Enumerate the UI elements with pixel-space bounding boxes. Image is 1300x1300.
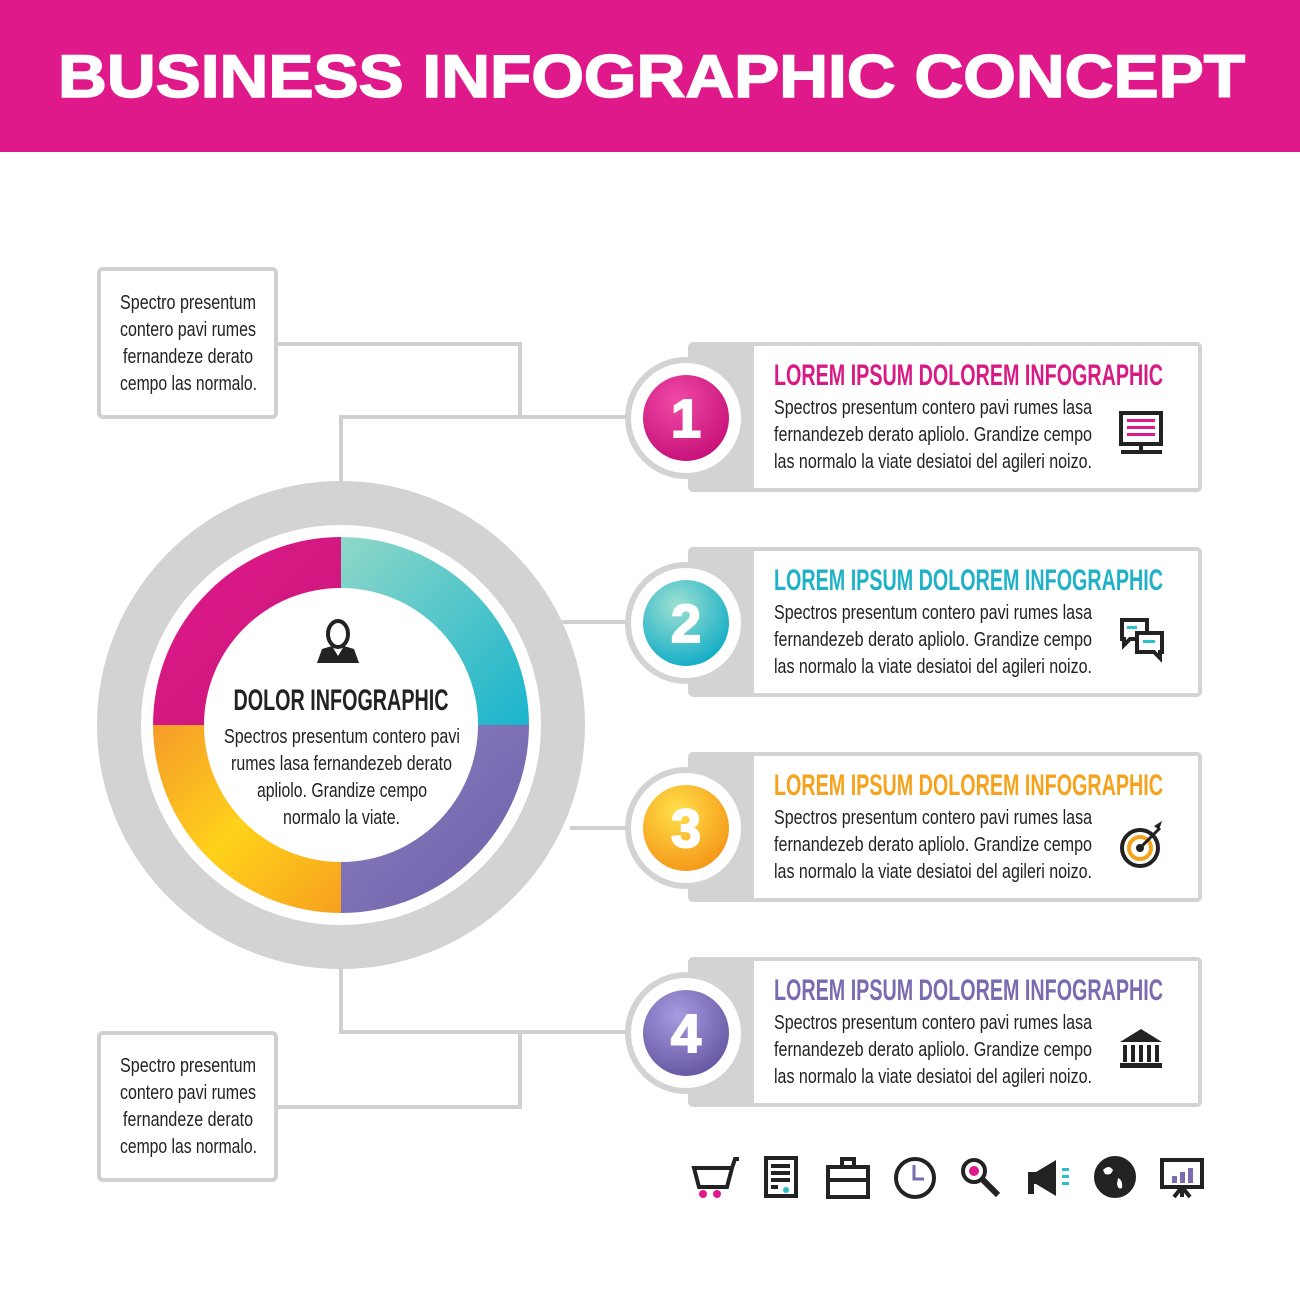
center text: normalo la viate. [283,807,400,829]
side note bottom: contero pavi rumes [120,1082,256,1104]
title: BUSINESS INFOGRAPHIC CONCEPT [58,43,1245,110]
icon: clock [896,1159,934,1197]
icon: monitor [1121,413,1162,454]
item 1: 1 [671,389,701,449]
central donut chart [119,503,563,947]
icon: document [766,1158,796,1196]
item 4: 4 [671,1004,701,1064]
side note top: contero pavi rumes [120,319,256,341]
side note top: Spectro presentum [120,292,256,314]
side note bottom [99,1033,276,1180]
icon: person [317,621,359,663]
bottom icon row [694,1158,1202,1198]
side note top [99,269,276,417]
icon: presentation board [1162,1160,1202,1197]
header band [0,0,1300,152]
center text: apliolo. Grandize cempo [257,780,427,802]
center heading: DOLOR INFOGRAPHIC [234,684,448,717]
item 4: las normalo la viate desiatoi del agileri noizo. [774,1066,1092,1088]
item 1: Spectros presentum contero pavi rumes lasa [774,397,1093,419]
icon: target [1122,821,1162,866]
item 3: 3 [671,799,701,859]
center text: Spectros presentum contero pavi [224,726,460,748]
item 2: 2 [671,594,701,654]
connector lines [277,344,628,1107]
center text: rumes lasa fernandezeb derato [231,753,452,775]
item 1: las normalo la viate desiatoi del agileri noizo. [774,451,1092,473]
item 1 [625,342,1202,492]
side note top: fernandeze derato [123,346,253,368]
item 3: Spectros presentum contero pavi rumes lasa [774,807,1093,829]
icon: cart [694,1159,739,1198]
icon: magnifier [963,1160,998,1195]
item 2: las normalo la viate desiatoi del agileri noizo. [774,656,1092,678]
icon: globe [1096,1158,1134,1196]
icon: megaphone [1028,1160,1069,1196]
side note top: cempo las normalo. [120,373,257,395]
icon: chat bubbles [1122,620,1162,658]
item 2: Spectros presentum contero pavi rumes lasa [774,602,1093,624]
side note bottom: Spectro presentum [120,1055,256,1077]
item 3: fernandezeb derato apliolo. Grandize cempo [774,834,1092,856]
side note bottom: fernandeze derato [123,1109,253,1131]
item 3 [625,752,1202,902]
item 4 [625,957,1202,1107]
item 4: fernandezeb derato apliolo. Grandize cempo [774,1039,1092,1061]
icon: bank [1120,1029,1162,1068]
item 3: las normalo la viate desiatoi del agileri noizo. [774,861,1092,883]
side note bottom: cempo las normalo. [120,1136,257,1158]
item 1: fernandezeb derato apliolo. Grandize cempo [774,424,1092,446]
item 4: Spectros presentum contero pavi rumes lasa [774,1012,1093,1034]
item 2 [625,547,1202,697]
icon: briefcase [828,1159,868,1197]
item 2: fernandezeb derato apliolo. Grandize cempo [774,629,1092,651]
